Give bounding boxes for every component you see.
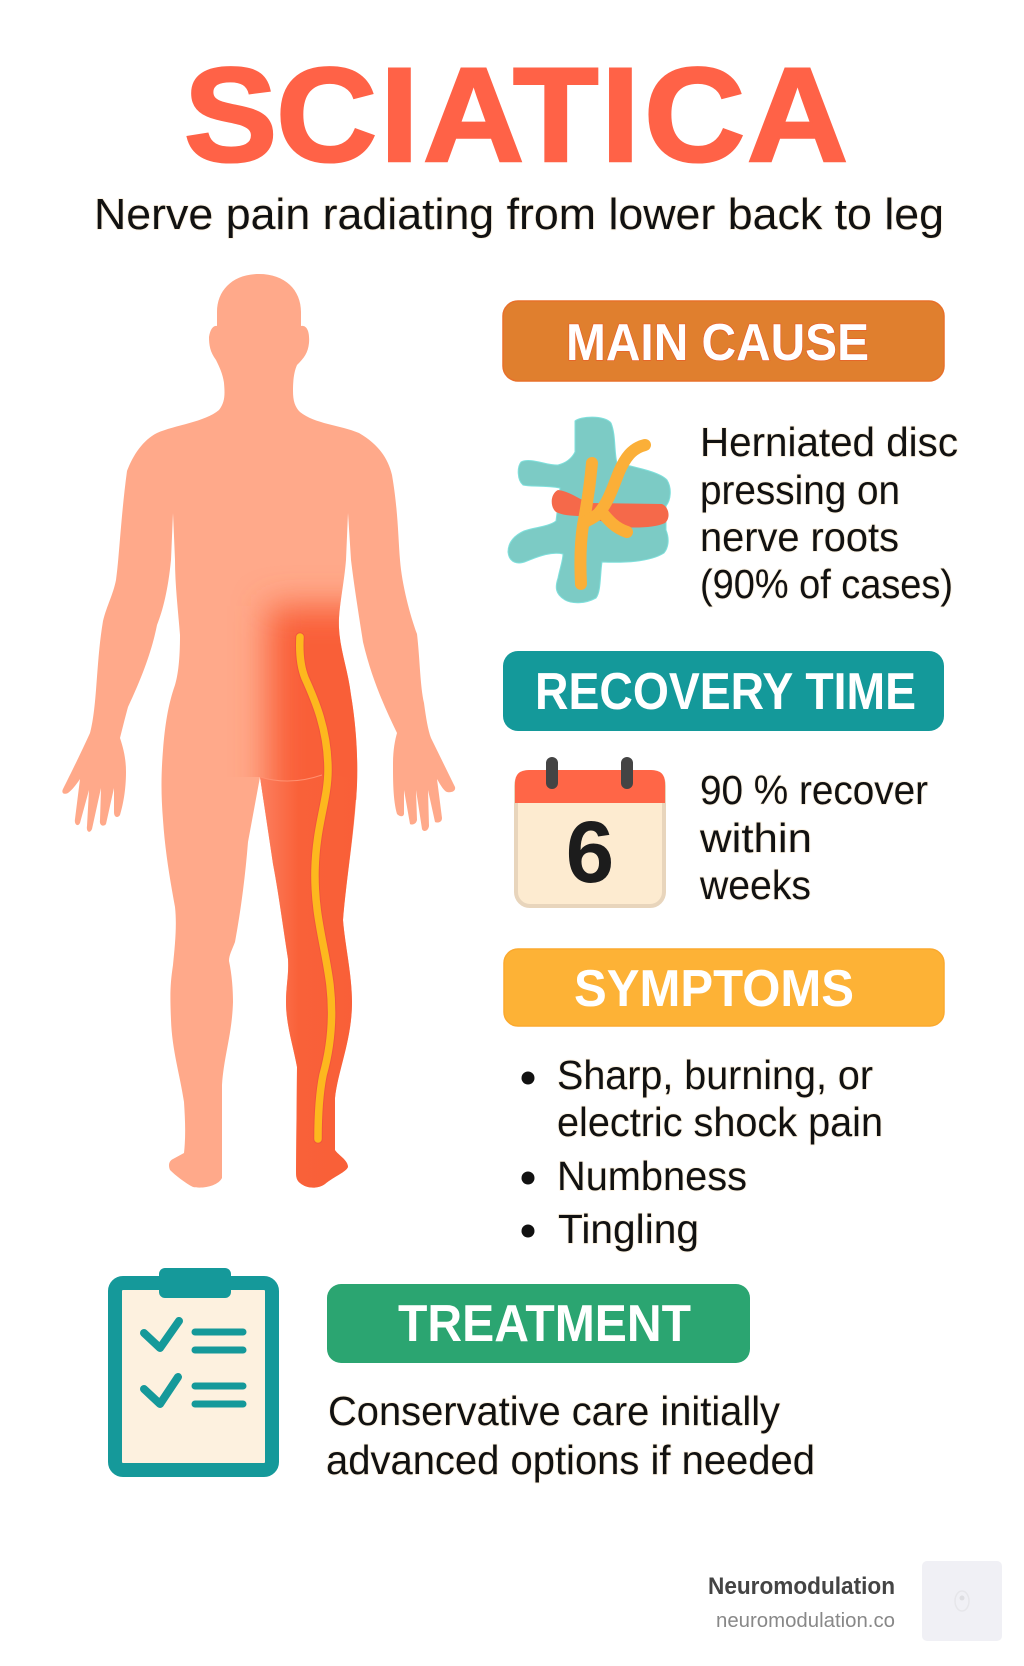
text: main cause description: Herniated disc (700, 419, 958, 465)
text: main cause description: nerve roots (700, 514, 899, 560)
symptom: numbness: Numbness (557, 1153, 747, 1199)
icon: calendar (515, 757, 665, 906)
bulging disc (552, 490, 669, 528)
text: recovery description: 90 % recover (700, 767, 928, 813)
heading: treatment (327, 1284, 750, 1363)
calendar header (515, 770, 665, 803)
symptom: sharp pain: electric shock pain (557, 1099, 883, 1145)
symptom: sharp pain: Sharp, burning, or (557, 1052, 873, 1098)
icon: herniated disc (508, 417, 670, 603)
heading: symptoms (504, 949, 944, 1026)
heading: main cause (503, 301, 944, 381)
number six: 6 (566, 804, 614, 901)
heading: recovery time (503, 651, 944, 731)
calendar page (516, 772, 664, 906)
subtitle: Nerve pain radiating from lower back to leg (94, 190, 944, 239)
text: treatment description: advanced options if needed (326, 1437, 815, 1483)
calendar rings (546, 757, 558, 789)
footer brand (708, 1573, 895, 1632)
text: main cause description (700, 419, 958, 607)
text: main cause description: pressing on (700, 467, 900, 513)
heading: main cause: MAIN CAUSE (566, 314, 869, 372)
pain glow: lower back and hip (247, 585, 358, 800)
icon: clipboard checklist (115, 1268, 272, 1470)
footer brand: neuromodulation.co (716, 1610, 895, 1632)
body silhouette (62, 274, 455, 1188)
text: treatment description (326, 1388, 815, 1483)
text: main cause description: (90% of cases) (700, 561, 953, 607)
symptom: tingling: Tingling (558, 1206, 699, 1252)
footer logo (922, 1561, 1002, 1641)
vertebrae (508, 417, 670, 603)
heading: recovery time: RECOVERY TIME (535, 663, 916, 721)
text: recovery description: weeks (699, 862, 811, 908)
affected leg (260, 775, 357, 1188)
list: symptoms (522, 1052, 883, 1252)
clipboard clip (159, 1268, 231, 1298)
symptom: sharp pain (522, 1052, 883, 1145)
heading: treatment: TREATMENT (398, 1295, 691, 1353)
text: recovery description: within (699, 815, 812, 861)
heading: symptoms: SYMPTOMS (574, 960, 854, 1018)
nerve roots (580, 445, 645, 584)
title: SCIATICA (184, 41, 848, 190)
footer brand: Neuromodulation (708, 1573, 895, 1600)
checklist marks (144, 1321, 243, 1404)
illustration: human body with sciatic nerve (62, 274, 455, 1188)
clipboard board (115, 1283, 272, 1470)
text: treatment description: Conservative care initially (328, 1388, 780, 1434)
text: recovery description (699, 767, 928, 908)
sciatic nerve (300, 637, 332, 1139)
